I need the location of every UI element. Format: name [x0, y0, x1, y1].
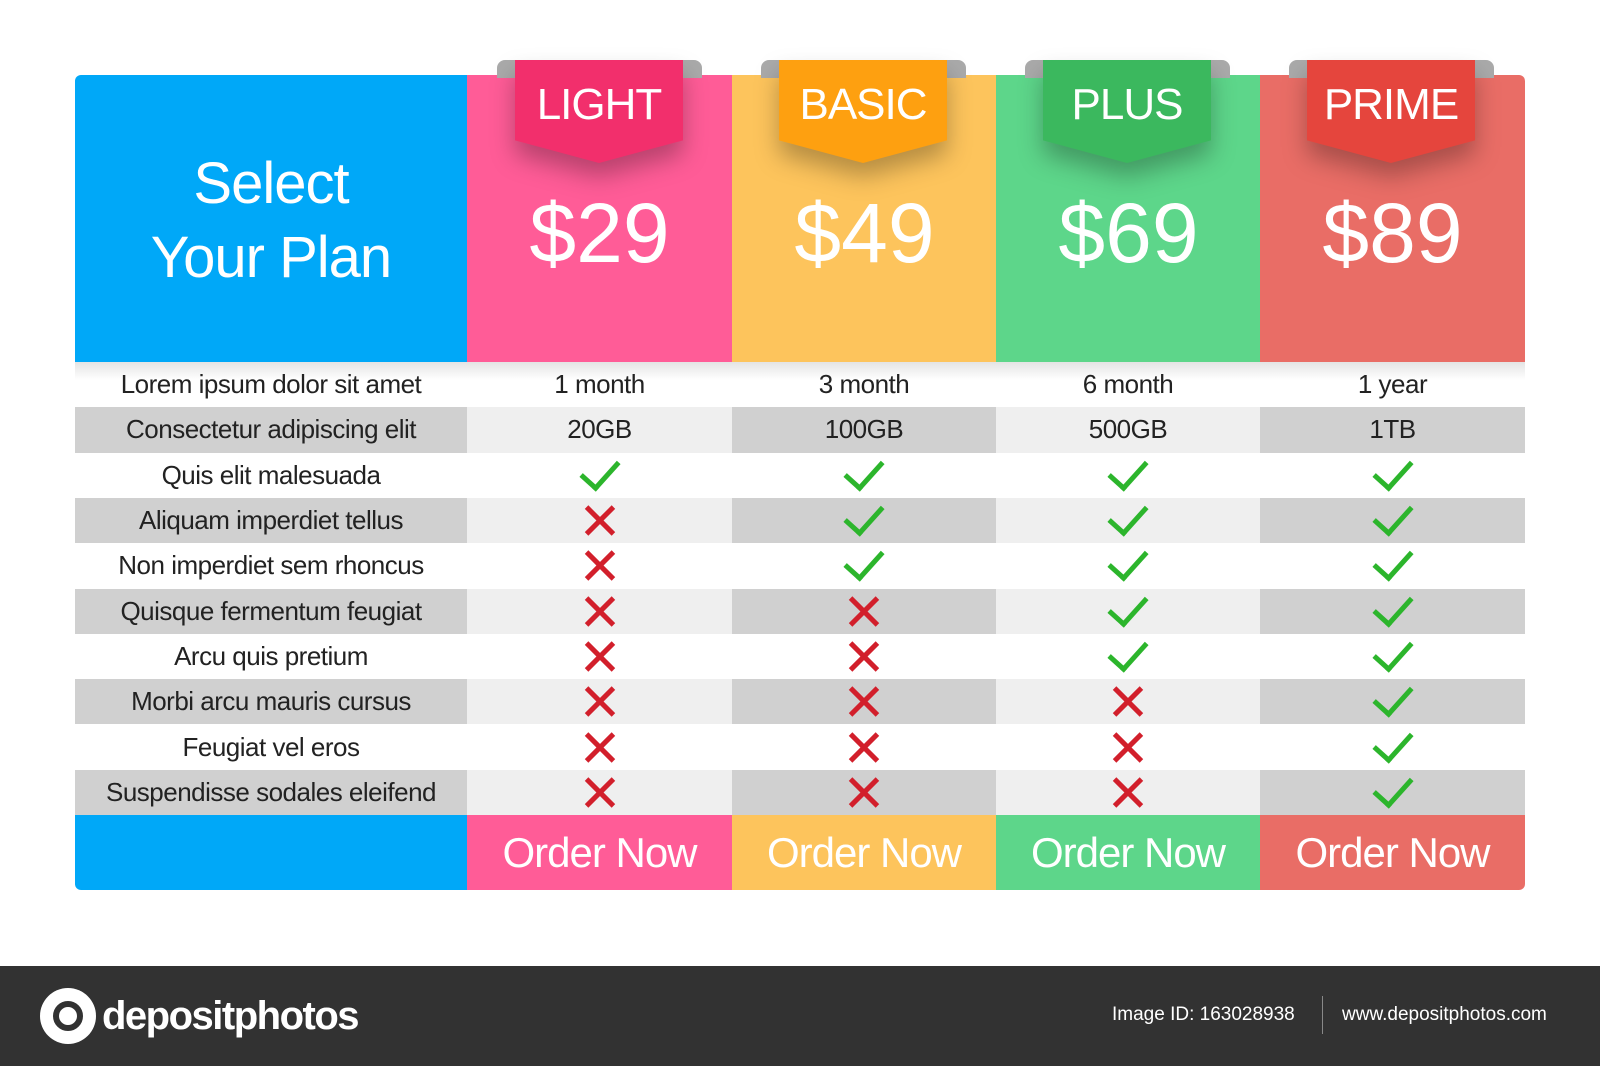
row 1: Lorem ipsum dolor sit amet [121, 369, 421, 399]
price: $69: $69 [1058, 186, 1199, 280]
row 2: 20GB [567, 414, 632, 444]
url: www.depositphotos.com [1342, 1004, 1547, 1025]
bottom bar [0, 966, 1600, 1066]
row 6 [75, 589, 1525, 634]
row 1: 6 month [1083, 369, 1173, 399]
feature table [75, 362, 1525, 815]
row 6: Quisque fermentum feugiat [120, 596, 422, 626]
row 1: 1 year [1358, 369, 1427, 399]
ribbon: PLUS: PLUS [1072, 80, 1182, 129]
image id: Image ID: 163028938 [1112, 1004, 1295, 1025]
ribbon: BASIC: BASIC [799, 80, 927, 129]
button: order now light: Order Now [502, 828, 697, 876]
footer: blue cell [75, 815, 467, 890]
logo [40, 988, 358, 1044]
row 2 [75, 407, 1525, 453]
price: $89: $89 [1322, 186, 1463, 280]
row 3: Quis elit malesuada [162, 460, 380, 490]
price: $49: $49 [794, 186, 935, 280]
row 4 [75, 498, 1525, 543]
row 5: Non imperdiet sem rhoncus [118, 550, 424, 580]
ribbon: PRIME: PRIME [1324, 80, 1458, 129]
row 1: 1 month [554, 369, 645, 399]
row 2: 1TB [1369, 414, 1416, 444]
header: prime column [1260, 75, 1525, 362]
row 2: Consectetur adipiscing elit [126, 414, 416, 444]
logo: depositphotos [102, 994, 358, 1038]
row 7: Arcu quis pretium [174, 641, 368, 671]
header: select your plan: Select [193, 151, 349, 216]
header: plus column [996, 75, 1260, 362]
button: order now prime [1260, 815, 1525, 890]
row 9: Feugiat vel eros [182, 732, 359, 762]
row 1: 3 month [819, 369, 909, 399]
header: select your plan [75, 75, 467, 362]
ribbon: LIGHT: LIGHT [537, 80, 661, 129]
row 2: 500GB [1089, 414, 1167, 444]
row 10 [75, 770, 1525, 815]
button: order now plus: Order Now [1031, 828, 1225, 876]
row 1 [75, 362, 1525, 407]
header: select your plan: Your Plan [151, 225, 391, 290]
row 4: Aliquam imperdiet tellus [139, 505, 403, 535]
price: $29: $29 [529, 186, 670, 280]
button: order now light [467, 815, 732, 890]
button: order now plus [996, 815, 1260, 890]
row 2: 100GB [825, 414, 903, 444]
header: light column [467, 75, 732, 362]
button: order now basic [732, 815, 996, 890]
header: basic column [732, 75, 996, 362]
button: order now prime: Order Now [1295, 828, 1490, 876]
row 8: Morbi arcu mauris cursus [131, 686, 411, 716]
row 10: Suspendisse sodales eleifend [106, 777, 436, 807]
button: order now basic: Order Now [767, 828, 961, 876]
row 8 [75, 679, 1525, 724]
